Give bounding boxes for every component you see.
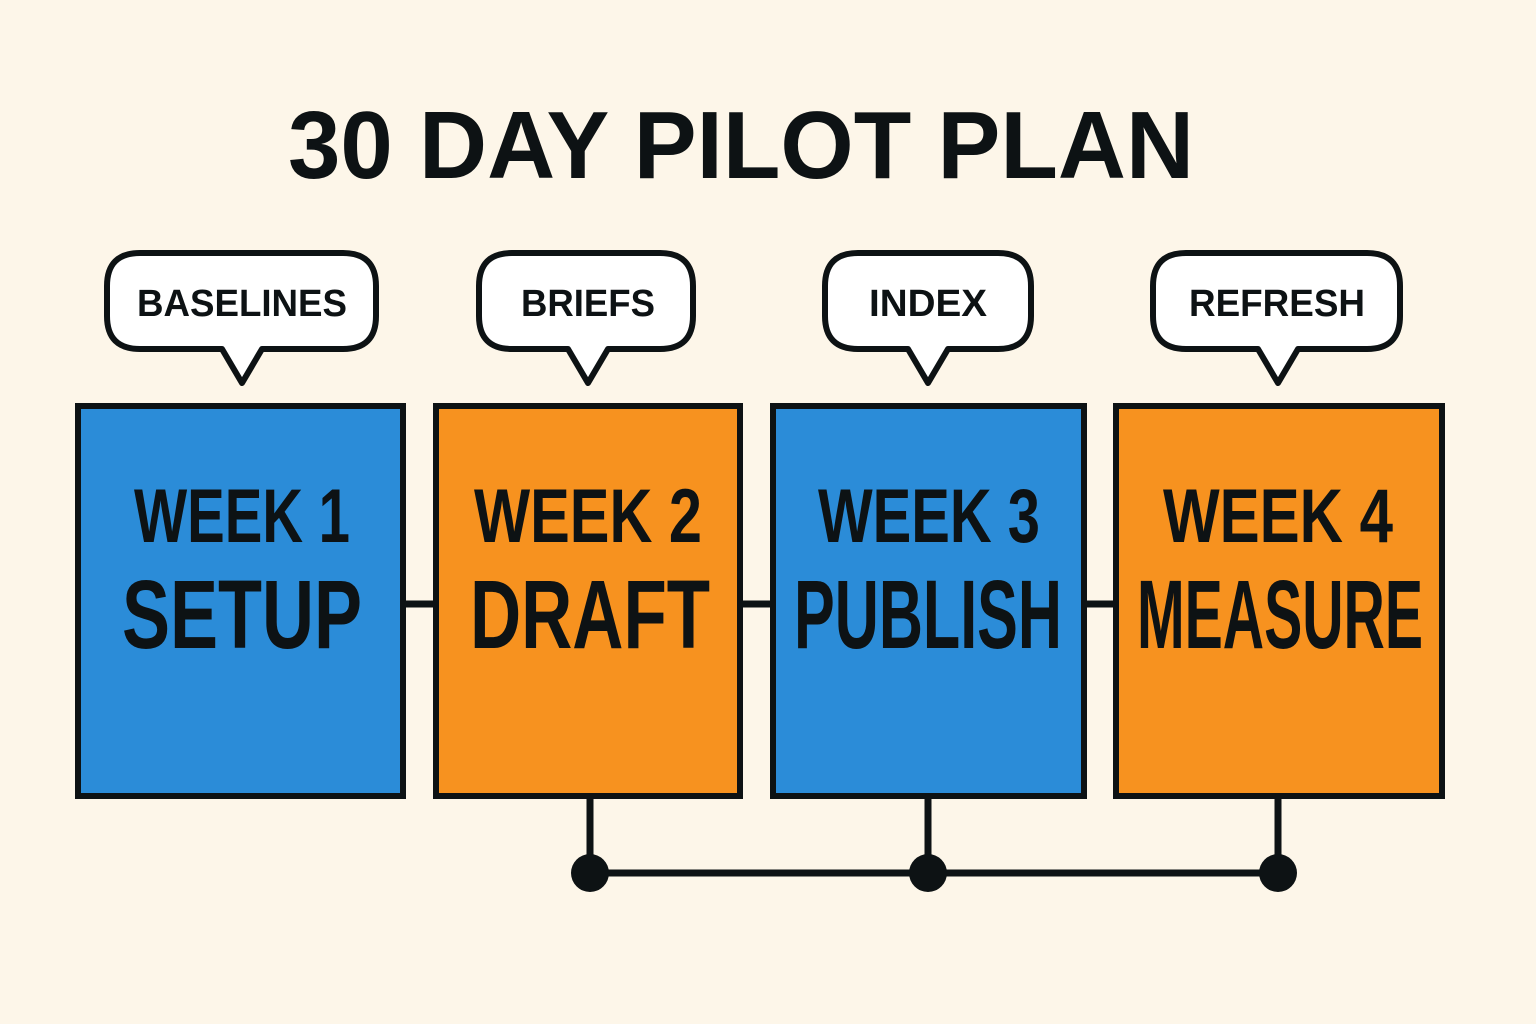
callout: index: INDEX bbox=[869, 283, 988, 325]
panel: week 2 draft bbox=[436, 406, 740, 796]
panel: week 1 setup: WEEK 1 bbox=[134, 474, 350, 559]
panel: week 3 publish: PUBLISH bbox=[794, 560, 1062, 669]
callout: refresh bbox=[1153, 253, 1400, 383]
panel: week 1 setup: SETUP bbox=[122, 560, 362, 669]
title: 30 DAY PILOT PLAN bbox=[288, 92, 1194, 199]
panel: week 4 measure: WEEK 4 bbox=[1163, 474, 1393, 559]
connectors between boxes bbox=[404, 600, 1115, 608]
panel: week 1 setup bbox=[78, 406, 403, 796]
panel: week 3 publish bbox=[773, 406, 1084, 796]
callout: briefs bbox=[479, 253, 693, 383]
callout: index bbox=[825, 253, 1031, 383]
panel: week 2 draft: DRAFT bbox=[470, 560, 710, 669]
callout: baselines: BASELINES bbox=[137, 283, 347, 325]
panel: week 3 publish: WEEK 3 bbox=[818, 474, 1040, 559]
panel: week 4 measure bbox=[1116, 406, 1442, 796]
callout: refresh: REFRESH bbox=[1189, 283, 1365, 325]
callout: briefs: BRIEFS bbox=[521, 283, 655, 325]
callout: baselines bbox=[107, 253, 376, 383]
bottom timeline bbox=[571, 797, 1297, 892]
panel: week 2 draft: WEEK 2 bbox=[474, 474, 702, 559]
